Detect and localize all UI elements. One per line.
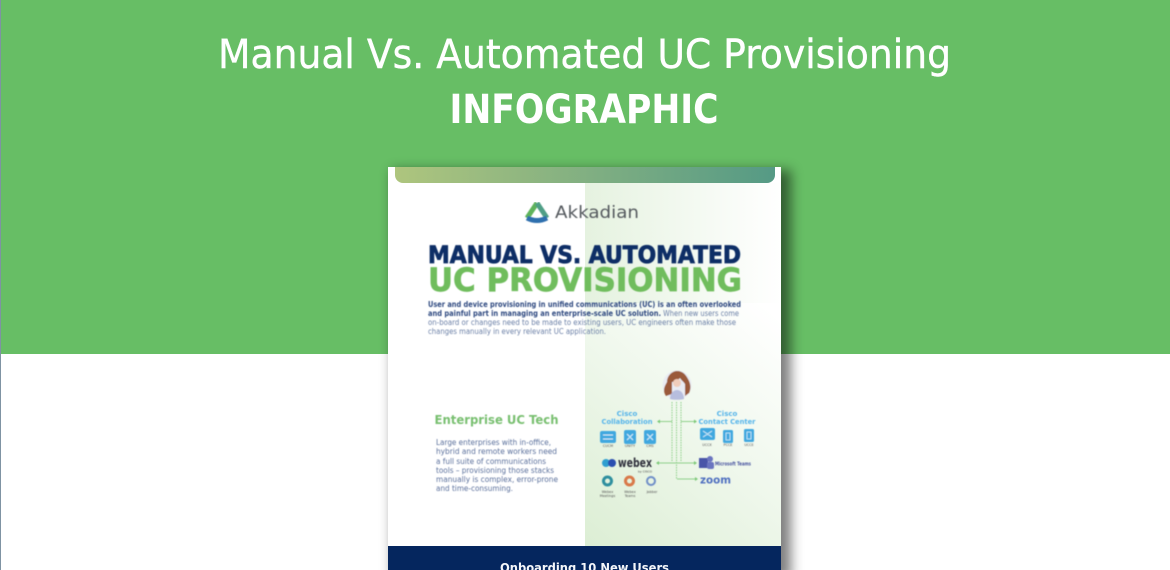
page title: Manual Vs. Automated UC Provisioning — [218, 32, 951, 78]
Enterprise UC Tech body: manually is complex, error-prone — [436, 475, 558, 484]
Webex app labels: Jabber — [646, 490, 658, 494]
icons: Cisco Collaboration apps — [600, 430, 656, 444]
Cisco Collaboration label: Collaboration — [602, 418, 653, 426]
card shadow — [392, 170, 791, 570]
green header band — [0, 0, 1170, 354]
Webex app labels: Webex — [602, 490, 613, 494]
Enterprise UC Tech heading: Enterprise UC Tech — [434, 412, 558, 427]
logo wordmark: Akkadian — [555, 203, 639, 223]
intro paragraph: on-board or changes need to be made to existing users, UC engineers often make those — [428, 318, 736, 327]
Enterprise UC Tech body: tools – provisioning those stacks — [436, 466, 554, 475]
Microsoft Teams logo — [699, 456, 751, 469]
Webex app labels: Meetings — [600, 494, 615, 498]
Cisco Collaboration label: Cisco — [617, 410, 638, 418]
Contact Center app labels: UCCX — [702, 443, 712, 447]
provisioning diagram — [600, 370, 756, 498]
Akkadian logo — [527, 203, 639, 223]
intro paragraph — [428, 300, 741, 336]
document page — [388, 167, 781, 570]
icon: person avatar — [662, 370, 692, 400]
top gradient bar — [395, 167, 775, 183]
headline line 2: UC PROVISIONING — [428, 261, 742, 299]
Cisco Contact Center label: Contact Center — [698, 418, 756, 426]
Contact Center app labels: UCCE — [744, 443, 754, 447]
intro paragraph: changes manually in every relevant UC application. — [428, 327, 606, 336]
intro paragraph: and painful part in managing an enterprise-scale UC solution. When new users come — [428, 309, 739, 318]
Cisco Collaboration app labels: CMS — [646, 444, 654, 448]
Enterprise UC Tech body — [436, 438, 558, 493]
webex logo: by CISCO — [638, 470, 653, 474]
Webex app labels: Teams — [624, 494, 636, 498]
Cisco Collaboration app labels: UNITY — [625, 444, 636, 448]
document headline: MANUAL VS. AUTOMATED — [428, 241, 741, 269]
Cisco Contact Center label: Cisco — [717, 410, 738, 418]
icons: Webex apps — [604, 477, 655, 485]
subtitle: INFOGRAPHIC — [450, 87, 718, 133]
Contact Center app labels: PCCE — [724, 443, 732, 447]
page title — [218, 32, 951, 133]
Cisco Collaboration app labels: CUCM — [603, 444, 613, 448]
webex logo: webex — [618, 456, 652, 470]
navy footer band — [388, 546, 781, 570]
Enterprise UC Tech body: hybrid and remote workers need — [436, 447, 557, 456]
Enterprise UC Tech body: Large enterprises with in-office, — [436, 438, 551, 447]
Cisco Collaboration label — [602, 410, 653, 426]
Webex app labels: Webex — [624, 490, 636, 494]
Contact Center app labels — [702, 443, 754, 447]
intro paragraph: User and device provisioning in unified communications (UC) is an often overlooked — [428, 300, 741, 309]
Enterprise UC Tech body: and time-consuming. — [436, 484, 513, 493]
Zoom logo: zoom — [700, 474, 731, 486]
Enterprise UC Tech body: a full suite of communications — [436, 457, 546, 466]
icon: logo triangle — [527, 203, 547, 220]
right tinted column — [585, 167, 781, 546]
document headline — [428, 241, 742, 299]
infographic document preview — [388, 167, 781, 570]
icons: Cisco Contact Center apps — [700, 428, 754, 443]
Webex app labels — [600, 490, 658, 498]
connector lines — [658, 402, 695, 479]
Cisco Collaboration app labels — [603, 444, 654, 448]
Microsoft Teams logo: Microsoft Teams — [715, 462, 751, 468]
arrowheads — [656, 420, 698, 481]
Cisco Contact Center label — [698, 410, 756, 426]
webex logo — [602, 456, 653, 474]
